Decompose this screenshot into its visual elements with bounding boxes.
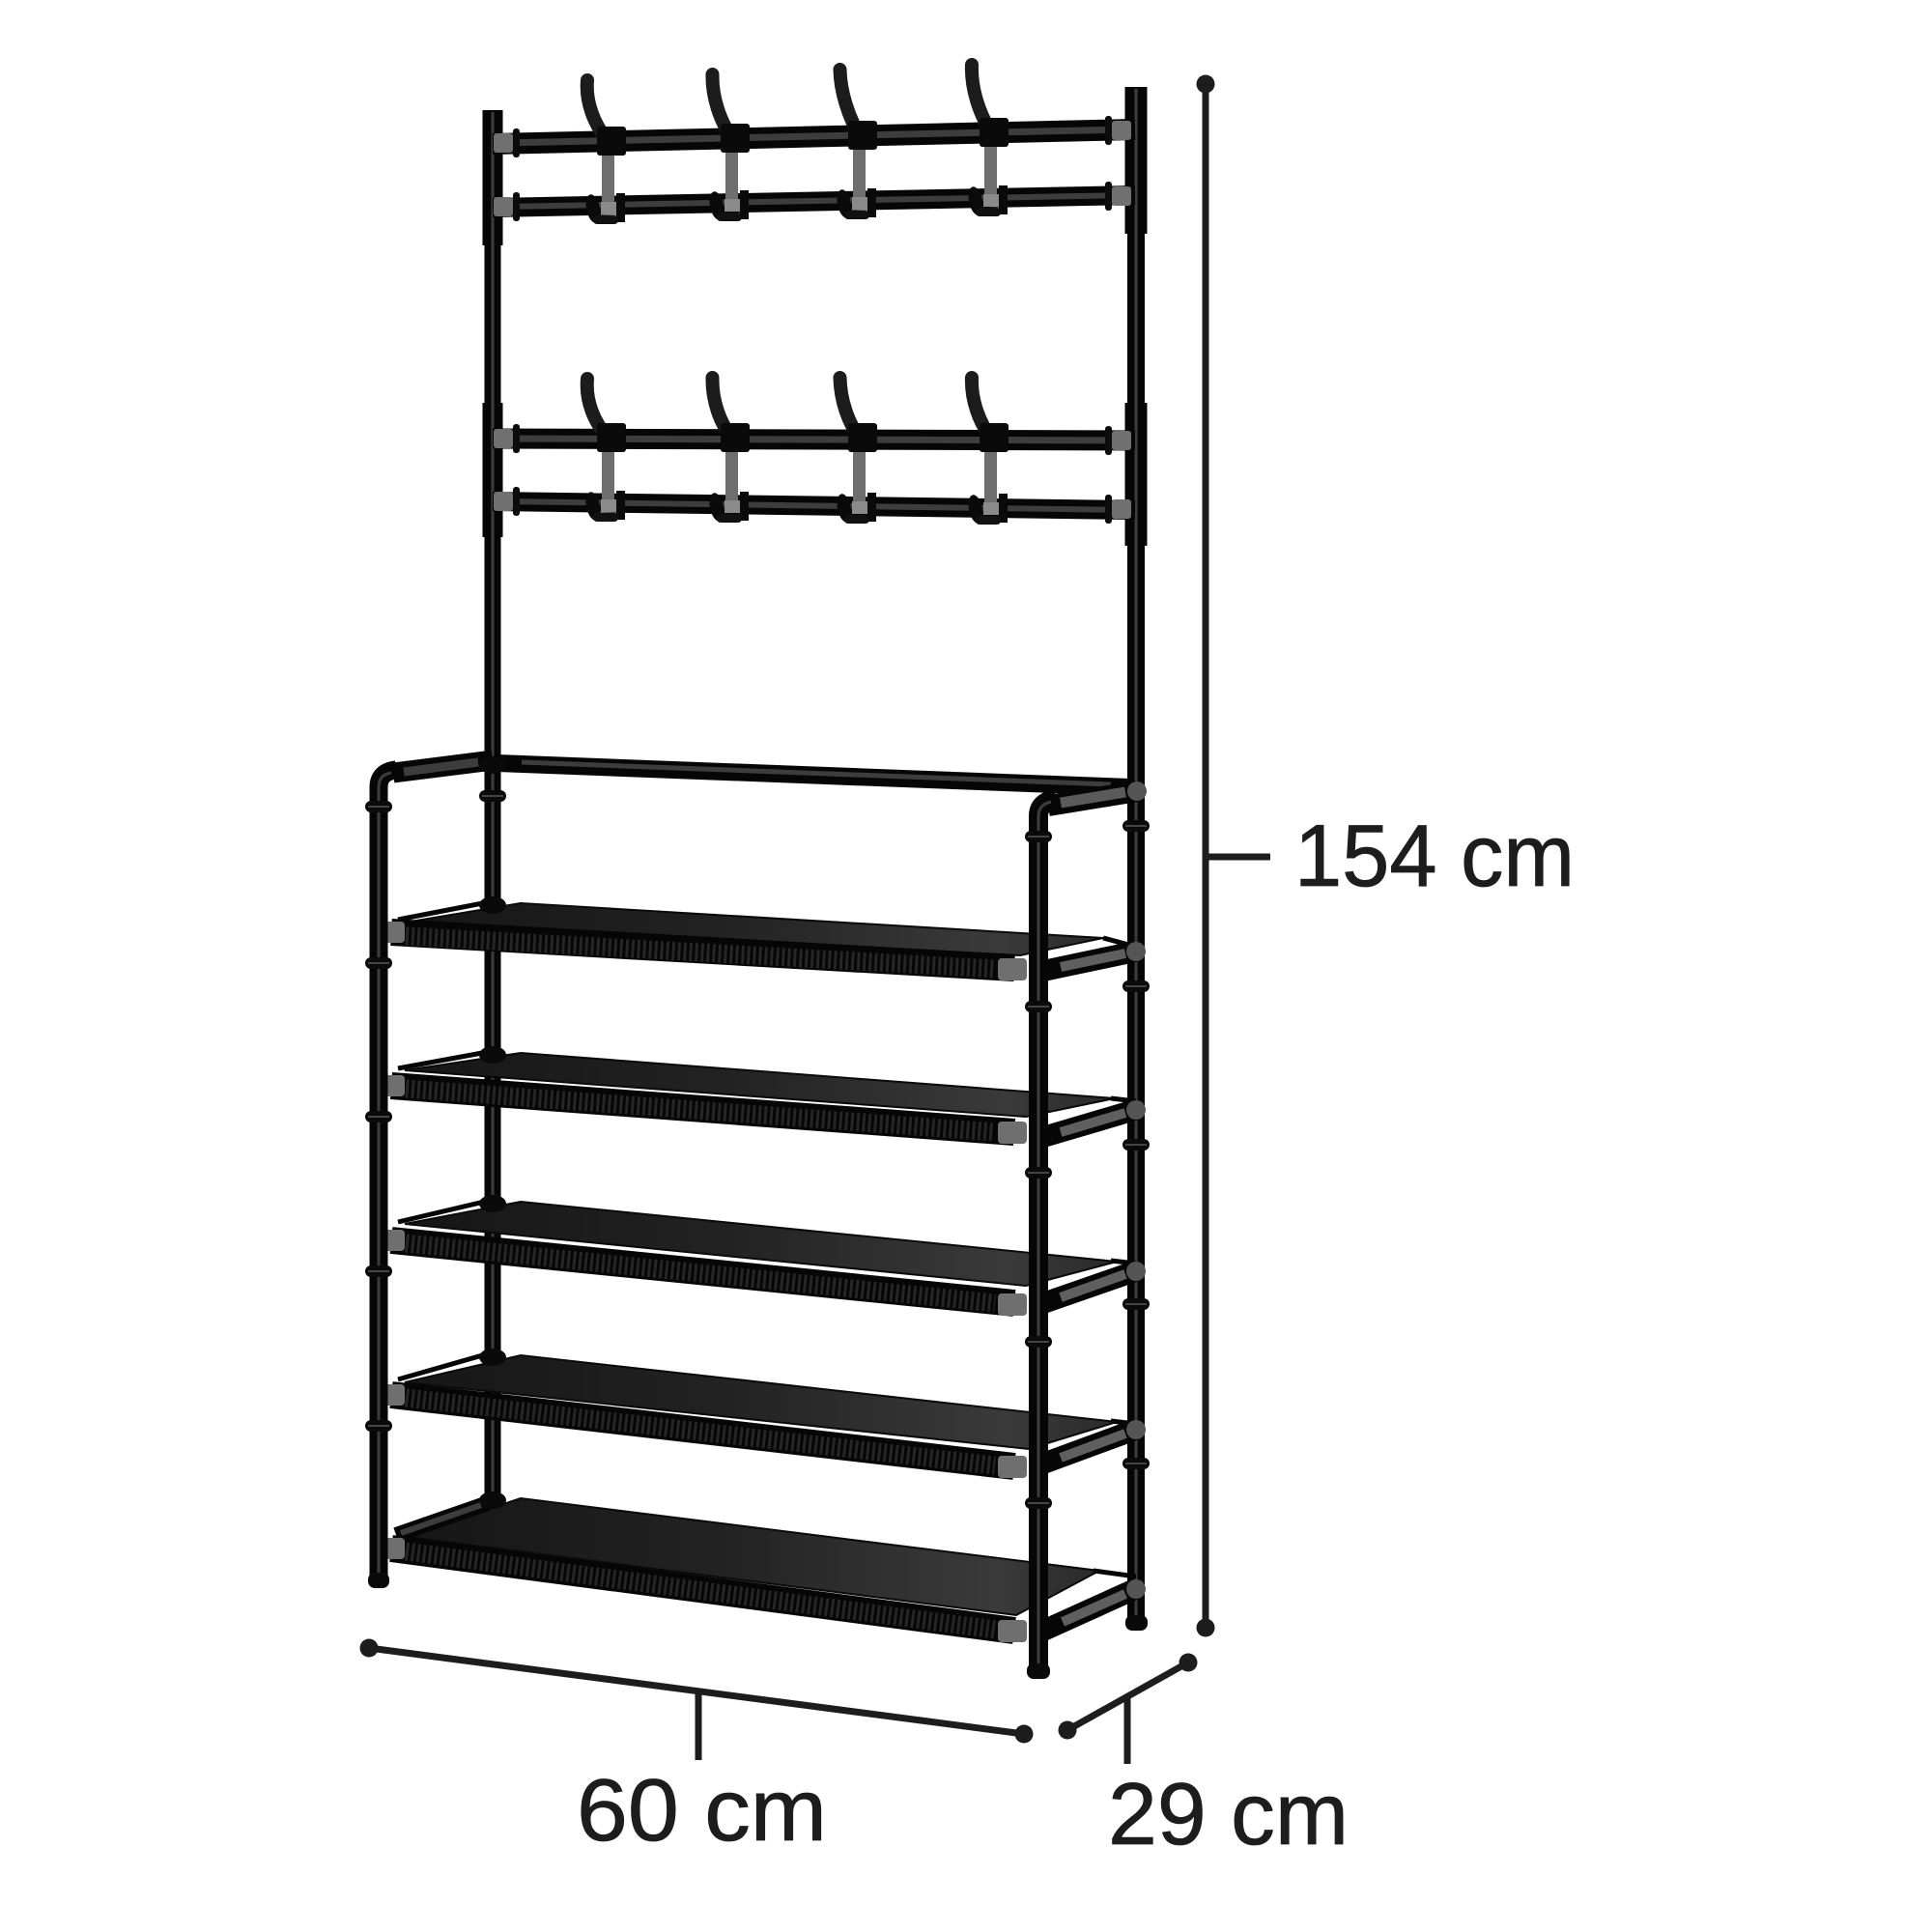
depth label: 29 cm — [1108, 1766, 1349, 1863]
height dimension line — [1196, 75, 1270, 1636]
shelf 2 — [378, 1046, 1146, 1144]
width label: 60 cm — [577, 1762, 827, 1860]
rear right post — [1125, 87, 1148, 1631]
depth dimension line — [1059, 1654, 1198, 1764]
top frame rails — [393, 756, 1147, 806]
rear right post collars — [1122, 820, 1150, 1469]
front left post — [365, 770, 396, 1588]
coat rail 4 — [493, 487, 1135, 524]
front right post — [1025, 799, 1056, 1679]
shelf 5 — [378, 1492, 1146, 1642]
coat rail 1 — [493, 116, 1135, 157]
coat rail 3 — [493, 424, 1135, 455]
shelf 3 — [378, 1195, 1146, 1316]
rack illustration — [365, 65, 1150, 1679]
shelf 1 — [378, 896, 1146, 980]
rear left post — [485, 110, 500, 1507]
height label: 154 cm — [1294, 808, 1575, 905]
upper hook row — [583, 65, 1009, 224]
lower hook row — [583, 378, 1009, 525]
width dimension line — [359, 1638, 1034, 1760]
coat rail 2 — [493, 182, 1135, 221]
shelf 4 — [378, 1349, 1146, 1478]
